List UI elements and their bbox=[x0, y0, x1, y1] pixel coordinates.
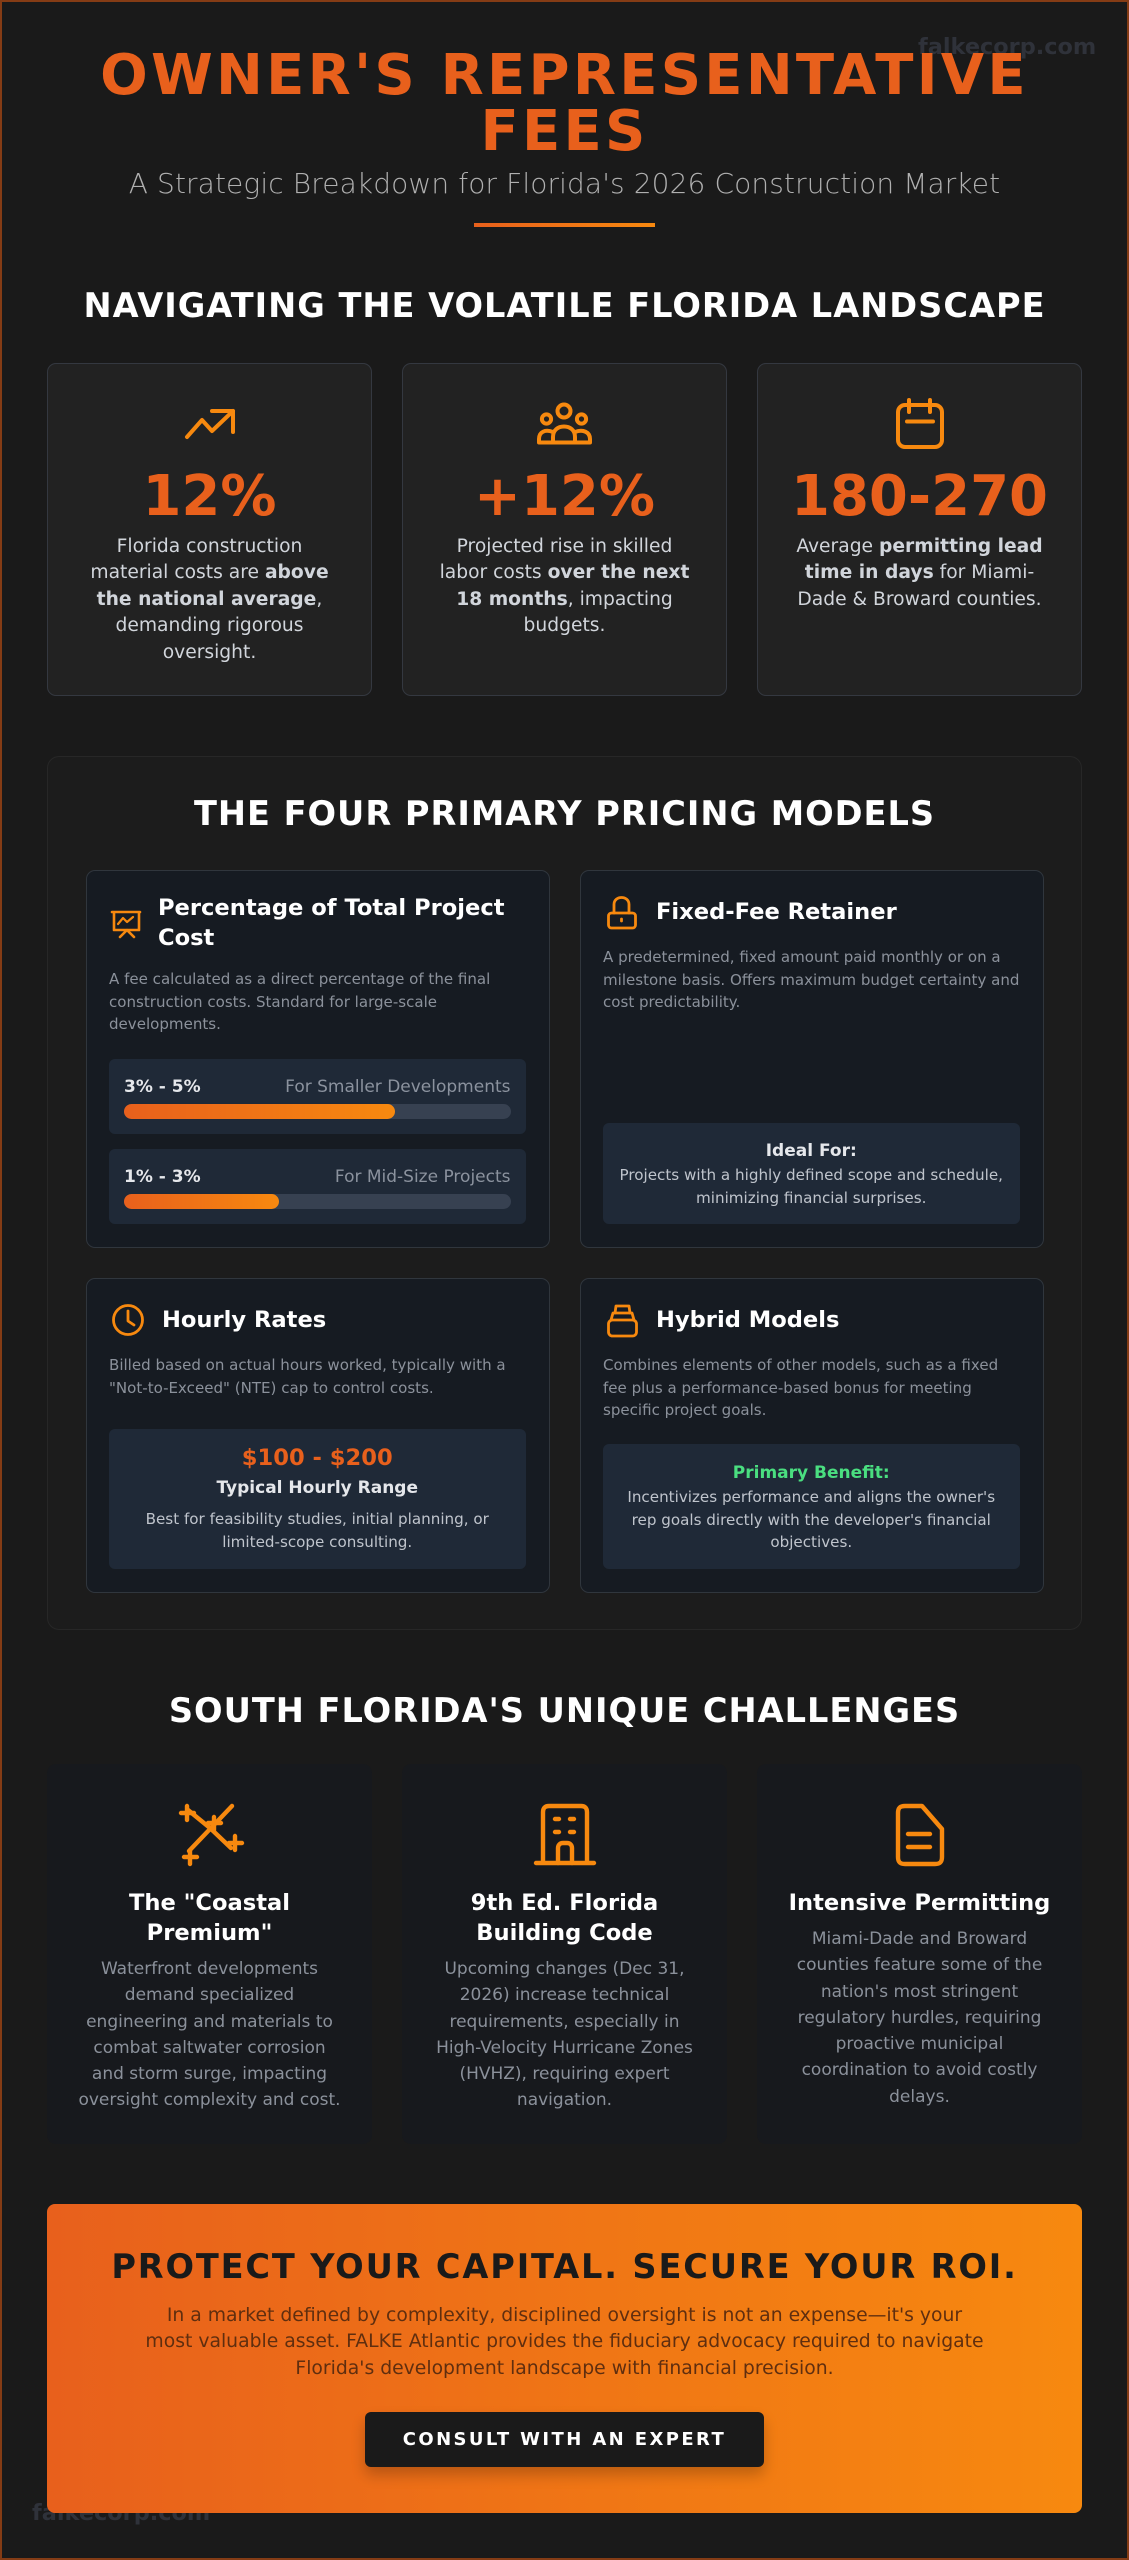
stat text: material costs are above bbox=[90, 562, 329, 583]
card text: Miami-Dade and Broward bbox=[812, 1929, 1027, 1949]
card description: milestone basis. Offers maximum budget certainty and bbox=[603, 971, 1019, 989]
cta button bbox=[365, 2412, 764, 2467]
card title: Cost bbox=[158, 925, 214, 951]
subtitle: A Strategic Breakdown for Florida's 2026 Construction Market bbox=[129, 167, 1000, 200]
card description: developments. bbox=[109, 1015, 221, 1033]
stat text bbox=[440, 536, 689, 636]
panel: coastal premium bbox=[47, 1764, 372, 2144]
cta text bbox=[145, 2305, 984, 2379]
card text bbox=[797, 1929, 1042, 2107]
panel: intensive permitting bbox=[757, 1764, 1082, 2144]
card title: Intensive Permitting bbox=[789, 1890, 1050, 1916]
rate value: $100 - $200 bbox=[242, 1445, 393, 1471]
watermark: bottom left: falkecorp.com bbox=[32, 2500, 210, 2526]
icon: calendar bbox=[896, 398, 944, 449]
progress bar bbox=[124, 1104, 510, 1119]
card text: and storm surge, impacting bbox=[92, 2064, 327, 2084]
callout text bbox=[620, 1166, 1003, 1207]
range label: For Mid-Size Projects bbox=[335, 1167, 510, 1187]
card text: High-Velocity Hurricane Zones bbox=[436, 2038, 693, 2058]
panel: building code bbox=[402, 1764, 727, 2144]
card title: Percentage of Total Project bbox=[158, 895, 505, 921]
icon: coastal tools bbox=[178, 1804, 244, 1866]
panel: pricing models bbox=[47, 756, 1082, 1630]
card description bbox=[603, 1356, 998, 1419]
card title: Hourly Rates bbox=[162, 1307, 326, 1333]
stat text: 18 months, impacting bbox=[456, 589, 673, 610]
card title: The "Coastal bbox=[129, 1890, 290, 1916]
panel: stat material costs bbox=[47, 363, 372, 696]
icon: presentation chart bbox=[110, 910, 142, 938]
card text: (HVHZ), requiring expert bbox=[459, 2064, 670, 2084]
card: fixed-fee retainer bbox=[580, 870, 1044, 1248]
progress bar bbox=[124, 1194, 510, 1209]
card text: nation's most stringent bbox=[821, 1982, 1018, 2002]
card description: cost predictability. bbox=[603, 993, 740, 1011]
title: OWNER'S REPRESENTATIVE bbox=[100, 43, 1029, 108]
card text: Waterfront developments bbox=[101, 1959, 318, 1979]
card text: delays. bbox=[889, 2087, 950, 2107]
card description: specific project goals. bbox=[603, 1401, 766, 1419]
heading: pricing models: THE FOUR PRIMARY PRICING MODELS bbox=[194, 794, 935, 833]
cta button: CONSULT WITH AN EXPERT bbox=[403, 2429, 726, 2450]
stat text: Florida construction bbox=[117, 536, 302, 557]
card description: construction costs. Standard for large-scale bbox=[109, 993, 437, 1011]
card: percentage of total project cost bbox=[86, 870, 550, 1248]
stat text: Projected rise in skilled bbox=[457, 536, 672, 557]
card text: combat saltwater corrosion bbox=[93, 2038, 326, 2058]
card text: proactive municipal bbox=[836, 2034, 1003, 2054]
card text: counties feature some of the bbox=[797, 1955, 1042, 1975]
icon: lock bbox=[607, 896, 637, 930]
card text: coordination to avoid costly bbox=[802, 2060, 1037, 2080]
cta text: In a market defined by complexity, disciplined oversight is not an expense—it's your bbox=[167, 2305, 962, 2326]
card text: engineering and materials to bbox=[86, 2012, 333, 2032]
stat number: 180-270 bbox=[791, 464, 1048, 529]
card: hybrid models bbox=[580, 1278, 1044, 1593]
callout: hourly range bbox=[109, 1429, 526, 1569]
heading: challenges: SOUTH FLORIDA'S UNIQUE CHALLENGES bbox=[169, 1691, 960, 1730]
callout text: rep goals directly with the developer's financial bbox=[632, 1511, 991, 1529]
callout title: Ideal For: bbox=[766, 1141, 857, 1161]
icon: clock bbox=[112, 1304, 144, 1336]
card description: Combines elements of other models, such as a fixed bbox=[603, 1356, 998, 1374]
callout: ideal for bbox=[603, 1123, 1020, 1224]
stat text: labor costs over the next bbox=[440, 562, 689, 583]
card description bbox=[603, 948, 1019, 1011]
range: smaller developments bbox=[109, 1059, 526, 1134]
range value: 1% - 3% bbox=[124, 1167, 201, 1187]
card description: Billed based on actual hours worked, typically with a bbox=[109, 1356, 506, 1374]
card description: A predetermined, fixed amount paid monthly or on a bbox=[603, 948, 1001, 966]
stat text bbox=[90, 536, 329, 663]
card title: Hybrid Models bbox=[656, 1307, 839, 1333]
callout text: objectives. bbox=[770, 1533, 852, 1551]
range: mid-size projects bbox=[109, 1149, 526, 1224]
card description: fee plus a performance-based bonus for meeting bbox=[603, 1379, 972, 1397]
icon: building bbox=[534, 1804, 596, 1866]
card title bbox=[158, 895, 505, 951]
callout text: Best for feasibility studies, initial planning, or bbox=[146, 1510, 489, 1528]
panel: stat labor costs bbox=[402, 363, 727, 696]
title divider bbox=[474, 223, 655, 227]
stat number: 12% bbox=[142, 464, 277, 529]
card text bbox=[78, 1959, 341, 2110]
card text: requirements, especially in bbox=[449, 2012, 680, 2032]
panel: call to action bbox=[47, 2204, 1082, 2513]
card description: A fee calculated as a direct percentage of the final bbox=[109, 970, 490, 988]
icon: stacked box bbox=[607, 1304, 638, 1338]
card text: oversight complexity and cost. bbox=[78, 2090, 341, 2110]
callout text bbox=[146, 1510, 489, 1551]
stat text: the national average, bbox=[97, 589, 322, 610]
card text bbox=[436, 1959, 693, 2110]
watermark: top right: falkecorp.com bbox=[918, 34, 1096, 60]
title: FEES bbox=[480, 99, 649, 164]
card: hourly rates bbox=[86, 1278, 550, 1593]
stat text: demanding rigorous bbox=[115, 615, 304, 636]
cta text: most valuable asset. FALKE Atlantic provides the fiduciary advocacy required to navigate bbox=[145, 2331, 984, 2352]
icon: trending up bbox=[184, 408, 236, 440]
card title bbox=[129, 1890, 290, 1946]
callout text: Projects with a highly defined scope and schedule, bbox=[620, 1166, 1003, 1184]
card title: 9th Ed. Florida bbox=[471, 1890, 658, 1916]
card text: navigation. bbox=[517, 2090, 612, 2110]
callout title: Primary Benefit: bbox=[733, 1463, 890, 1483]
range value: 3% - 5% bbox=[124, 1077, 201, 1097]
stat text: Average permitting lead bbox=[796, 536, 1043, 557]
stat text: Dade & Broward counties. bbox=[797, 589, 1042, 610]
range label: For Smaller Developments bbox=[285, 1077, 510, 1097]
callout text: limited-scope consulting. bbox=[222, 1533, 412, 1551]
callout: primary benefit bbox=[603, 1444, 1020, 1569]
callout text bbox=[627, 1488, 995, 1551]
card title: Building Code bbox=[476, 1920, 653, 1946]
callout text: Incentivizes performance and aligns the owner's bbox=[627, 1488, 995, 1506]
heading: landscape: NAVIGATING THE VOLATILE FLORIDA LANDSCAPE bbox=[83, 286, 1046, 325]
stat text: oversight. bbox=[163, 642, 256, 663]
card description bbox=[109, 1356, 506, 1397]
stat text bbox=[796, 536, 1043, 610]
card text: regulatory hurdles, requiring bbox=[798, 2008, 1041, 2028]
card title bbox=[471, 1890, 658, 1946]
rate label: Typical Hourly Range bbox=[216, 1478, 418, 1498]
stat text: budgets. bbox=[524, 615, 605, 636]
stat text: time in days for Miami- bbox=[805, 562, 1034, 583]
cta heading: PROTECT YOUR CAPITAL. SECURE YOUR ROI. bbox=[111, 2247, 1018, 2286]
stat number: +12% bbox=[474, 464, 655, 529]
icon: people bbox=[537, 402, 592, 444]
icon: document bbox=[896, 1804, 944, 1866]
title bbox=[100, 43, 1029, 164]
panel: stat permitting lead time bbox=[757, 363, 1082, 696]
card text: 2026) increase technical bbox=[460, 1985, 669, 2005]
card title: Premium" bbox=[147, 1920, 272, 1946]
cta text: Florida's development landscape with financial precision. bbox=[295, 2358, 834, 2379]
card text: demand specialized bbox=[125, 1985, 294, 2005]
callout text: minimizing financial surprises. bbox=[696, 1189, 926, 1207]
card description bbox=[109, 970, 490, 1033]
card title: Fixed-Fee Retainer bbox=[656, 899, 897, 925]
card text: Upcoming changes (Dec 31, bbox=[444, 1959, 685, 1979]
card description: "Not-to-Exceed" (NTE) cap to control costs. bbox=[109, 1379, 434, 1397]
